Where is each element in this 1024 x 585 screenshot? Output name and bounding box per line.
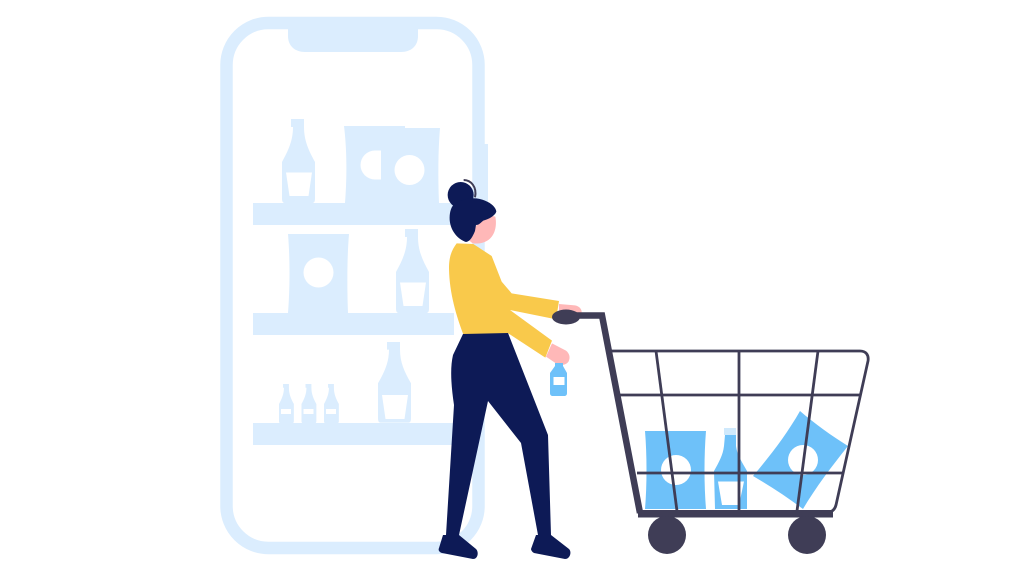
hand holding bottle <box>546 343 570 365</box>
sweater <box>449 243 559 358</box>
top shelf <box>253 119 468 225</box>
middle shelf <box>253 229 454 335</box>
right shoe <box>531 535 570 559</box>
small bottles <box>279 384 339 423</box>
hand on handle <box>559 304 582 315</box>
cart base <box>638 510 833 518</box>
large bottle on bottom shelf <box>378 342 411 423</box>
basket wire <box>608 351 868 512</box>
face and neck <box>467 215 496 244</box>
blue bottle <box>714 428 747 509</box>
bottle on top shelf <box>282 119 315 203</box>
bag on top shelf, left <box>344 126 405 203</box>
bag on top shelf, right <box>381 128 440 203</box>
handle grip <box>552 310 580 324</box>
stray hair <box>464 180 475 197</box>
hair <box>448 182 496 242</box>
phone notch <box>288 24 418 52</box>
bottle on middle shelf <box>396 229 429 313</box>
shopping cart <box>552 310 868 554</box>
phone frame <box>226 23 488 548</box>
bag on middle shelf <box>288 234 349 313</box>
trousers <box>446 333 551 535</box>
tilted blue bag <box>753 411 848 509</box>
products in cart <box>645 411 848 509</box>
left shoe <box>439 535 478 559</box>
cart handle and frame <box>570 316 640 513</box>
left wheel <box>648 516 686 554</box>
blue bag <box>645 431 706 509</box>
bottom shelf <box>253 342 454 445</box>
right wheel <box>788 516 826 554</box>
bottle in hand <box>550 363 567 396</box>
woman <box>439 180 582 559</box>
phone side button <box>484 144 488 234</box>
